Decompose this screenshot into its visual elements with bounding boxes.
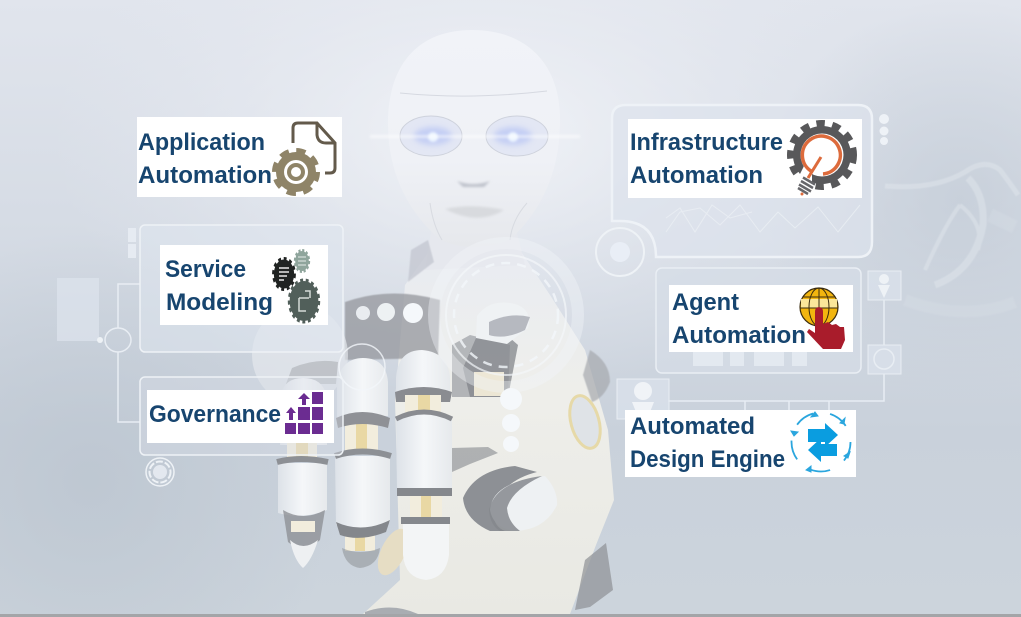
- line chart in right panel: [666, 205, 860, 232]
- robot: [252, 30, 614, 614]
- robot neck: [425, 225, 525, 270]
- connector disc: [372, 524, 414, 580]
- label: Infrastructure Automation: Infrastructure: [630, 129, 783, 156]
- robot lower side shade: [575, 543, 613, 610]
- label: Service Modeling: Service: [165, 256, 246, 283]
- robot palm shade: [345, 293, 440, 360]
- robot nose: [457, 181, 490, 187]
- bar code strip: [693, 352, 807, 366]
- panel: right upper frame: [612, 105, 872, 257]
- label: Infrastructure Automation: [630, 129, 783, 189]
- label: Service Modeling: Modeling: [166, 289, 273, 316]
- panel: left lower frame: [140, 377, 343, 455]
- robot right shoulder shade: [583, 350, 610, 402]
- thumb: [463, 466, 557, 531]
- icon: globe and pointing hand: [800, 288, 845, 349]
- label: Automated Design Engine: Design Engine: [630, 446, 785, 473]
- card: Service Modeling: [160, 245, 328, 325]
- pinky finger: [277, 378, 328, 568]
- label: Automated Design Engine: [630, 413, 785, 473]
- label: Agent Automation: [672, 289, 806, 349]
- label: Service Modeling: [165, 256, 273, 316]
- icon: exchange arrows in circle: [791, 412, 850, 472]
- wrist connector: [286, 361, 338, 384]
- left connector diagram: [57, 228, 140, 422]
- icon: target dial: [596, 228, 644, 276]
- robot mouth: [445, 206, 504, 218]
- icon: document and gear: [274, 123, 335, 194]
- ring finger: [335, 358, 391, 568]
- robot torso: [363, 250, 614, 614]
- label: Application Automation: Application: [138, 129, 265, 156]
- label: Application Automation: [138, 129, 272, 189]
- mesh wave decoration: [885, 164, 1018, 312]
- index finger: [463, 302, 530, 397]
- card: Infrastructure Automation: [628, 119, 862, 198]
- icon: small ring: [146, 458, 174, 486]
- jaw seams: [430, 203, 527, 240]
- icon: rising blocks: [285, 392, 323, 434]
- label: Governance: Governance: [149, 401, 281, 428]
- middle finger: [395, 350, 452, 580]
- eye flare: [370, 135, 580, 138]
- right connectors: [617, 271, 901, 419]
- label: Infrastructure Automation: Automation: [630, 162, 763, 189]
- shoulder badge: [564, 392, 606, 452]
- card: Automated Design Engine: [625, 410, 856, 477]
- card: Governance: [147, 390, 334, 443]
- robot right eye: [486, 116, 548, 156]
- white dots on hand: [356, 303, 522, 452]
- forehead seam: [400, 91, 547, 96]
- label: Agent Automation: Automation: [672, 322, 806, 349]
- forearm disc: [252, 305, 348, 405]
- dots: [879, 114, 889, 145]
- label: Agent Automation: Agent: [672, 289, 739, 316]
- icon: gear with bulb: [791, 124, 853, 198]
- target rings over finger: [339, 243, 578, 390]
- card: Application Automation: [137, 117, 342, 197]
- panel: left upper frame: [140, 225, 343, 352]
- card: Agent Automation: [669, 285, 853, 352]
- label: Automated Design Engine: Automated: [630, 413, 755, 440]
- panel: right middle frame: [656, 268, 861, 373]
- robot left eye: [400, 116, 462, 156]
- icon: three gears: [274, 250, 319, 322]
- robot head: [388, 30, 560, 247]
- label: Application Automation: Automation: [138, 162, 272, 189]
